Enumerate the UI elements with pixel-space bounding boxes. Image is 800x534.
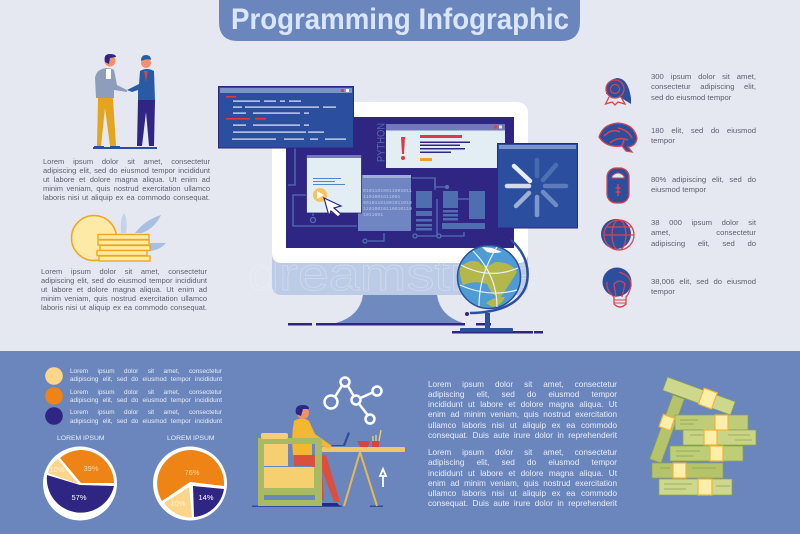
binary window: 11010010110010110 <box>363 206 412 212</box>
pie chart: right: 10% <box>170 499 186 508</box>
text: brain item: tempor <box>651 136 675 145</box>
text block: main paragraph two: enim ad minim veniam, quis nostrud exercitation <box>428 479 617 488</box>
icon: padlock <box>607 168 629 203</box>
text block: main paragraph two <box>428 448 617 508</box>
money texture lines <box>660 420 752 489</box>
icon: brain <box>599 123 637 152</box>
text block: main paragraph two: incididunt ut labore et dolore magna aliqua. Ut <box>428 468 617 478</box>
legend text: third <box>70 409 222 424</box>
text block: coins paragraph: minim veniam, quis nostrud exercitation ullamco <box>41 294 207 302</box>
text: brain item <box>651 126 756 145</box>
text block: handshake paragraph: laboris nisi ut aliquip ex ea commodo consequat. <box>43 192 210 202</box>
monitor stand <box>336 295 463 323</box>
legend text: second <box>70 388 222 404</box>
illustration: globe <box>458 240 528 332</box>
text: padlock item: eiusmod tempor <box>651 185 706 194</box>
pie title: left: LOREM IPSUM <box>57 435 105 442</box>
circuit lines <box>288 148 469 243</box>
video window with cursor <box>306 155 362 217</box>
binary window <box>358 175 412 231</box>
legend text: third: adipiscing elit, sed do eiusmod tempor incididunt <box>70 418 222 424</box>
flowchart blocks <box>416 191 485 230</box>
pie chart: left: 57% <box>71 493 87 502</box>
pie chart: right <box>153 446 227 520</box>
text: bulb item: tempor <box>651 287 675 296</box>
text block: coins paragraph: ut labore et dolore magna aliqua. Ut enim ad <box>41 284 207 294</box>
text: award item: 300 ipsum dolor sit amet, <box>651 72 756 81</box>
pie chart: left: 10% <box>49 465 65 474</box>
pie chart: right: 14% <box>198 493 214 502</box>
text block: handshake paragraph: adipiscing elit, sed do eiusmod tempor incididunt <box>43 166 210 174</box>
icon: award badge <box>606 78 631 105</box>
text block: handshake paragraph: minim veniam, quis nostrud exercitation ullamco <box>43 184 210 192</box>
text: award item: consectetur adipiscing elit, <box>651 82 756 91</box>
watermark: dreamstime <box>248 248 540 300</box>
text block: handshake paragraph: ut labore et dolore magna aliqua. Ut enim ad <box>43 174 210 184</box>
text block: coins paragraph: laboris nisi ut aliquip ex ea commodo consequat. <box>41 302 207 312</box>
icon: globe <box>601 219 634 250</box>
icon: light bulb <box>602 268 632 307</box>
illustration: person working at desk <box>252 405 405 507</box>
text block: main paragraph one: incididunt ut labore et dolore magna aliqua. Ut <box>428 400 617 409</box>
code window <box>218 86 354 148</box>
monitor screen <box>286 117 514 248</box>
text block: main paragraph two: Lorem ipsum dolor sit amet, consectetur <box>428 448 617 457</box>
monitor chin <box>272 255 528 295</box>
python label: PYTHON <box>376 123 388 162</box>
text block: handshake paragraph <box>43 156 210 202</box>
text block: main paragraph one: enim ad minim veniam, quis nostrud exercitation <box>428 410 617 419</box>
text block: main paragraph two: consequat. Duis aute irure dolor in reprehenderit <box>428 499 617 508</box>
text block: coins paragraph: Lorem ipsum dolor sit amet, consectetur <box>41 266 207 276</box>
text: padlock item: 80% adipiscing elit, sed do <box>651 175 756 184</box>
legend text: second: Lorem ipsum dolor sit amet, consectetur <box>70 388 222 396</box>
bottom panel background <box>0 351 800 534</box>
monitor bezel <box>272 102 528 263</box>
legend swatches <box>45 367 63 425</box>
laptop and cup <box>330 432 350 446</box>
binary window: 00101101001011010 <box>363 200 412 206</box>
icon: network nodes <box>324 378 382 424</box>
text: bulb item <box>651 276 756 296</box>
ground lines <box>288 323 543 334</box>
text block: main paragraph one: consequat. Duis aute irure dolor in reprehenderit <box>428 431 617 440</box>
text block: main paragraph one: ullamco laboris nisi ut aliquip ex ea commodo <box>428 420 617 430</box>
armchair <box>258 433 322 506</box>
pie chart: right: 76% <box>184 468 200 477</box>
text block: handshake paragraph: Lorem ipsum dolor sit amet, consectetur <box>43 156 210 166</box>
illustration: monitor <box>218 86 578 334</box>
pie chart: left <box>43 446 117 520</box>
legend text: third: Lorem ipsum dolor sit amet, consectetur <box>70 409 222 416</box>
text block: coins paragraph: adipiscing elit, sed do eiusmod tempor incididunt <box>41 276 207 284</box>
pie chart: left: 39% <box>83 464 99 473</box>
text block: coins paragraph <box>41 266 207 312</box>
legend text: second: adipiscing elit, sed do eiusmod tempor incididunt <box>70 397 222 404</box>
legend text: first <box>70 368 222 383</box>
illustration: coins and leaves <box>72 213 166 261</box>
text: globe item: amet, consectetur <box>651 228 756 237</box>
text: padlock item <box>651 175 756 194</box>
text: award item <box>651 72 756 102</box>
desk <box>320 447 405 506</box>
legend text: first: Lorem ipsum dolor sit amet, consectetur <box>70 368 222 374</box>
legend text: first: adipiscing elit, sed do eiusmod tempor incididunt <box>70 376 222 383</box>
text: globe item <box>651 218 756 248</box>
binary window: 1101001011001 <box>363 194 401 200</box>
person <box>294 455 340 502</box>
loading spinner window <box>498 144 578 228</box>
up arrow <box>380 469 386 487</box>
binary window: 1011001 <box>363 212 383 218</box>
text block: main paragraph two: ullamco laboris nisi ut aliquip ex ea commodo <box>428 489 617 498</box>
binary window: 01011010011001011 <box>363 188 412 194</box>
text block: main paragraph two: adipiscing elit, sed do eiusmod tempor <box>428 458 617 467</box>
alert window <box>386 124 505 168</box>
text: award item: sed do eiusmod tempor <box>651 93 731 102</box>
text: globe item: adipiscing elit, sed do <box>651 239 756 248</box>
pie title: right: LOREM IPSUM <box>167 435 215 442</box>
text block: main paragraph one: Lorem ipsum dolor sit amet, consectetur <box>428 380 617 388</box>
text: bulb item: 38,006 elit, sed do eiusmod <box>651 276 756 286</box>
text block: main paragraph one: adipiscing elit, sed do eiusmod tempor <box>428 390 617 399</box>
text block: main paragraph one <box>428 380 617 440</box>
text: globe item: 38 000 ipsum dolor sit <box>651 218 756 227</box>
text: brain item: 180 elit, sed do eiusmod <box>651 126 756 135</box>
title banner: Programming Infographic <box>231 3 569 36</box>
illustration: two men shaking hands <box>93 54 157 149</box>
illustration: stack of money <box>650 377 756 495</box>
